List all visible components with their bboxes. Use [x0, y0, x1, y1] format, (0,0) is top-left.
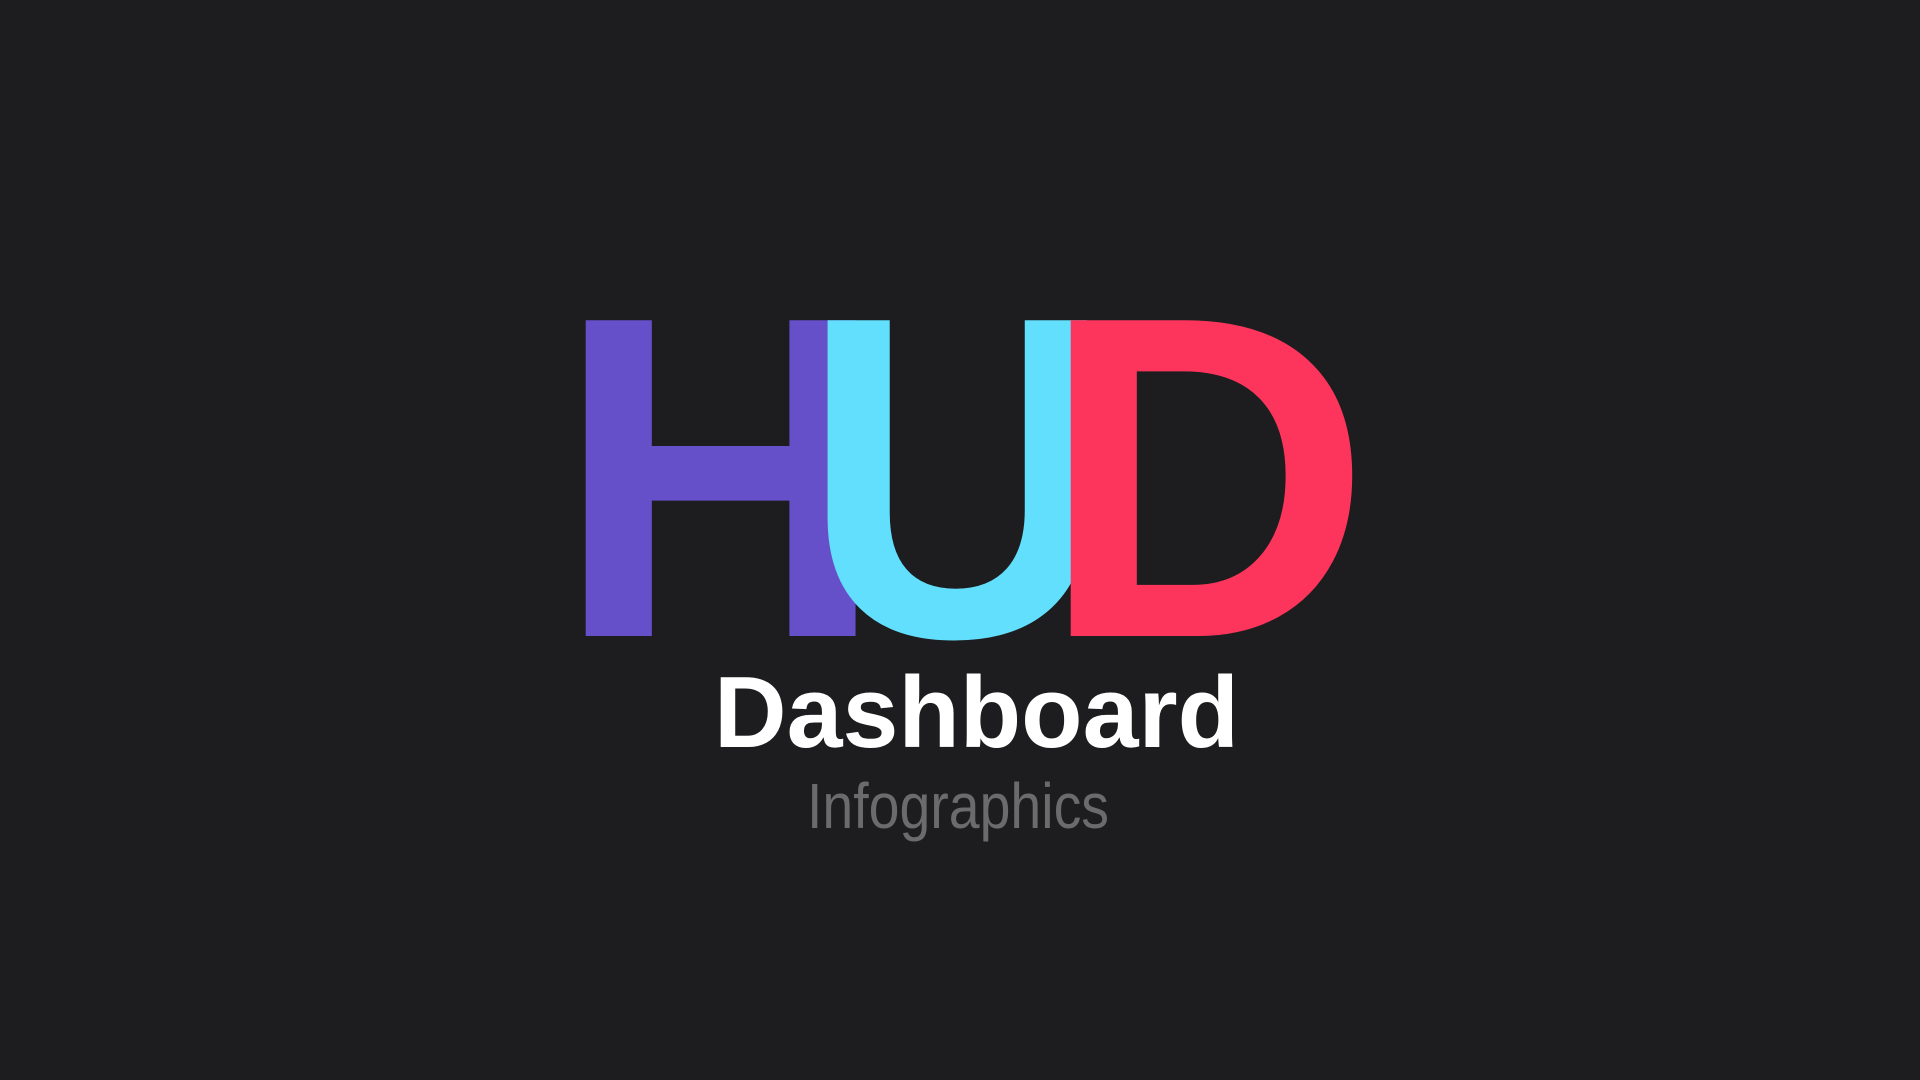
tagline: Infographics: Infographics: [807, 770, 1109, 842]
title: HUD logo letters: [555, 221, 1371, 734]
letter H: H: [555, 221, 886, 734]
subtitle: Dashboard: Dashboard: [714, 657, 1239, 769]
letter U: U: [802, 222, 1113, 734]
letter D: D: [1040, 221, 1371, 734]
